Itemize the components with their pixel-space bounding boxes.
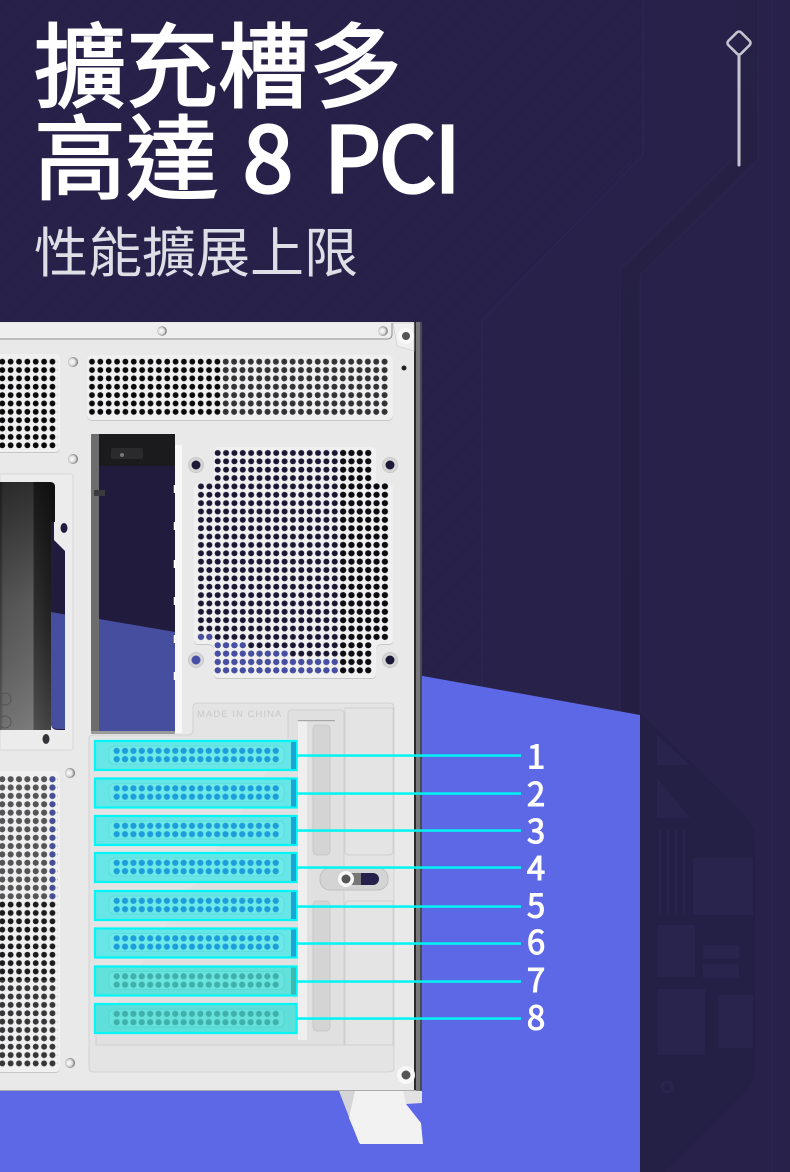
PCI slot 8 [95, 992, 545, 1040]
card strip [298, 720, 335, 1040]
PCI slot 6: 6 [527, 916, 545, 964]
lever [320, 868, 388, 890]
vent: top wide [87, 355, 393, 421]
PCI slot 7: 7 [527, 954, 545, 1002]
vent: lower left [0, 771, 60, 1073]
PCI slot 1 [95, 730, 545, 778]
panel: circuit board pattern [640, 712, 755, 1172]
blue diagonal panel [0, 600, 640, 1172]
top rim [0, 323, 414, 351]
case body [0, 322, 416, 1091]
PCI slot 5 [95, 880, 545, 928]
PCI slot 2 [95, 768, 545, 816]
vent: large fan mount [194, 447, 393, 679]
thumb screws [397, 328, 415, 1084]
PCI slot 4 [95, 842, 545, 890]
expansion slot opening [91, 434, 182, 734]
case foot [339, 1091, 423, 1144]
title [34, 0, 459, 219]
PCI slot 2: 2 [527, 768, 545, 816]
hole: oval [60, 523, 68, 533]
PCI slot 3: 3 [527, 805, 545, 853]
blue dots see-through [197, 633, 339, 675]
side plates [345, 708, 393, 1045]
window opening [0, 474, 73, 750]
subtitle: 性能擴展上限 [34, 209, 358, 288]
vent slots [313, 725, 330, 1031]
vent: top left [0, 354, 60, 453]
PCI slot 6 [95, 916, 545, 964]
PCI slot 7 [95, 954, 545, 1002]
case right edge [414, 322, 422, 1092]
hole: oval lower [42, 734, 50, 744]
PCI slot 1: 1 [527, 730, 545, 778]
made in china mark: MADE IN CHINA [197, 709, 282, 720]
PCI slot 5: 5 [527, 880, 545, 928]
screws [65, 326, 388, 1068]
PCI slot 3 [95, 805, 545, 853]
title line 2: PCI [324, 88, 459, 218]
PCI slot 4: 4 [527, 842, 545, 890]
title line 2: 8 [243, 88, 293, 218]
retention bracket [96, 710, 344, 1045]
icon: diamond pin [726, 30, 752, 165]
title line 2: 高達 [34, 86, 218, 219]
PCI bracket recess [89, 703, 394, 1072]
PCI slot 8: 8 [527, 992, 545, 1040]
computer case rear panel [0, 322, 422, 1092]
mount holes [188, 366, 406, 668]
